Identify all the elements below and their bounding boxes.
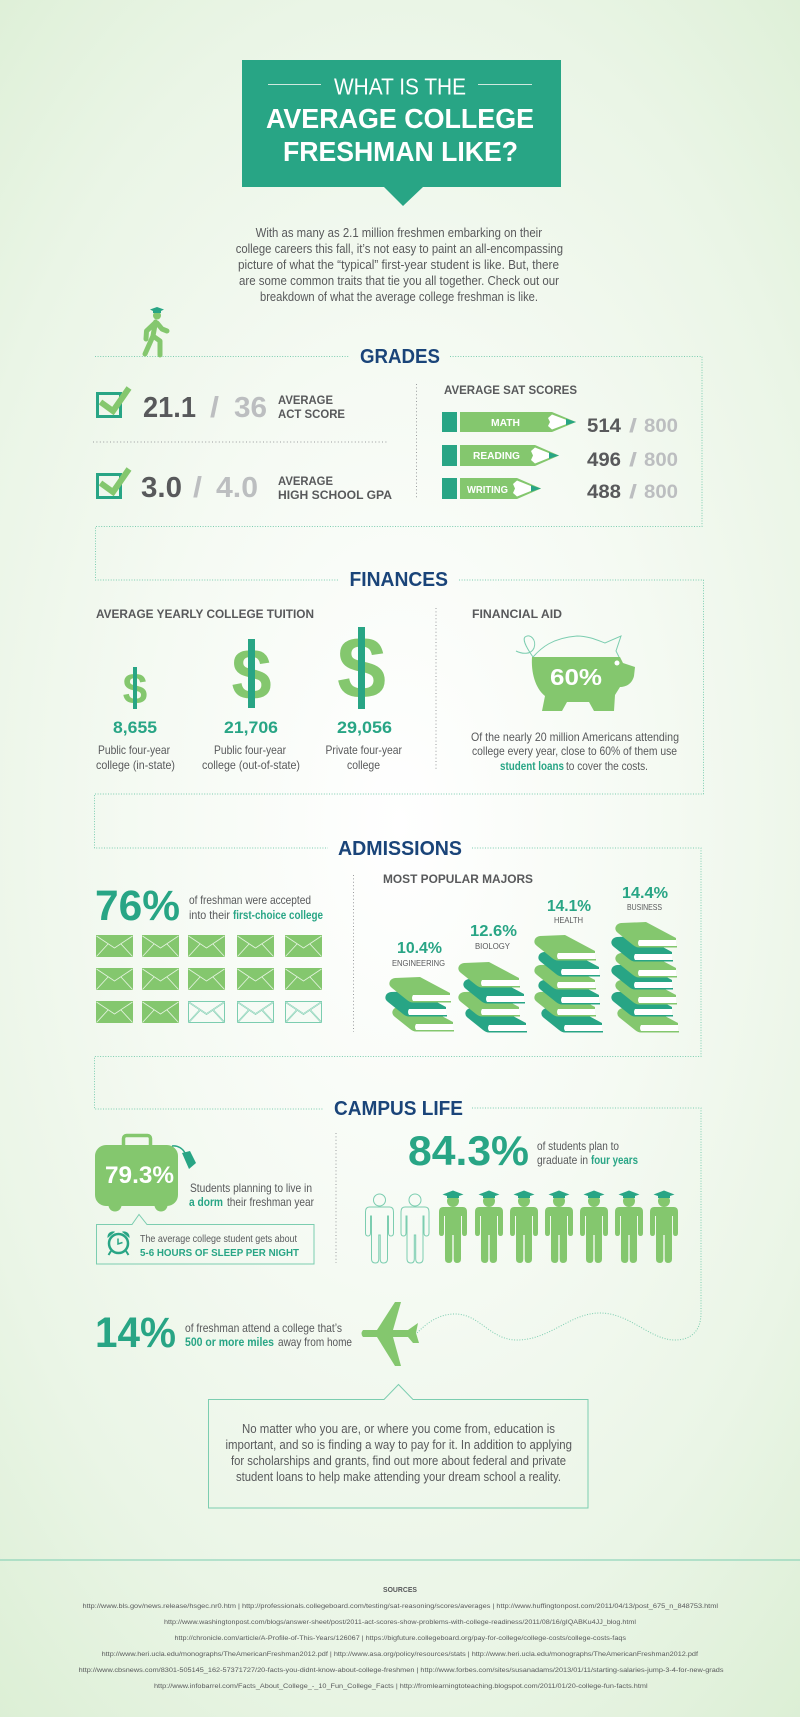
dorm statistic with suitcase: Students planning to live in <box>190 1181 312 1195</box>
most popular majors <box>383 874 679 1032</box>
tuition: in-state: college (in-state) <box>96 758 175 772</box>
graduation statistic: of students plan to <box>537 1139 619 1153</box>
icon: alarm clock <box>108 1232 129 1255</box>
graduation statistic <box>408 1127 638 1174</box>
sources: http://www.infobarrel.com/Facts_About_College_-_10_Fun_College_Facts | http://fromlearningtoteaching.blogspot.com/2011/01/20-college-fun-facts.html <box>154 1683 648 1690</box>
major: business: 14.4% <box>622 885 668 902</box>
financial aid text: college every year, close to 60% of them use <box>472 744 677 758</box>
panel: grades <box>93 346 678 504</box>
tuition: out-of-state: $ <box>231 635 272 715</box>
icon: piggy bank <box>516 636 635 711</box>
financial aid: FINANCIAL AID <box>472 609 562 621</box>
pencil: reading: 496 <box>587 450 621 471</box>
pencil: math <box>442 412 678 437</box>
intro paragraph: college careers this fall, it’s not easy to paint an all-encompassing <box>236 242 563 256</box>
graduation statistic: four years <box>591 1153 638 1167</box>
distance statistic: of freshman attend a college that’s <box>185 1321 342 1335</box>
financial aid text: student loans <box>500 759 564 773</box>
ACT score: ACT SCORE <box>278 409 345 421</box>
GPA score: AVERAGE <box>278 476 333 488</box>
tuition: in-state <box>96 665 175 772</box>
closing callout: No matter who you are, or where you come from, education is <box>242 1422 555 1436</box>
financial aid <box>471 609 679 773</box>
major: biology: 12.6% <box>470 923 517 940</box>
tuition: private <box>326 618 402 772</box>
intro paragraph: picture of what the “typical” first-year student is like. But, there <box>238 258 559 272</box>
pencil: writing: 488 <box>587 482 621 503</box>
dorm statistic with suitcase <box>95 1136 314 1212</box>
graduation statistic: 84.3% <box>408 1127 529 1174</box>
callout: sleep: The average college student gets about <box>140 1233 297 1245</box>
major: business: BUSINESS <box>627 902 662 912</box>
pencil: math: 514 <box>587 416 621 437</box>
tuition: in-state: 8,655 <box>113 719 157 737</box>
major: engineering: 10.4% <box>397 940 442 957</box>
financial aid text: to cover the costs. <box>566 759 648 773</box>
tuition: in-state: Public four-year <box>98 743 170 757</box>
distance statistic: 500 or more miles <box>185 1335 274 1349</box>
graduation statistic: graduate in <box>537 1153 588 1167</box>
envelopes pictogram <box>96 935 322 1023</box>
dorm statistic with suitcase: 79.3% <box>105 1162 174 1189</box>
heading: finances: FINANCES <box>350 569 448 591</box>
GPA score: HIGH SCHOOL GPA <box>278 490 392 502</box>
ACT score: / <box>210 392 219 424</box>
closing callout <box>208 1384 588 1508</box>
panel: campus life <box>95 1098 678 1366</box>
title banner: AVERAGE COLLEGE <box>266 103 534 134</box>
tuition: private: 29,056 <box>337 719 392 737</box>
intro paragraph <box>236 226 563 304</box>
heading: admissions: ADMISSIONS <box>338 838 462 860</box>
intro paragraph: breakdown of what the average college freshman is like. <box>260 290 538 304</box>
financial aid text: Of the nearly 20 million Americans attending <box>471 730 679 744</box>
callout: sleep: 5-6 HOURS OF SLEEP PER NIGHT <box>140 1247 300 1259</box>
GPA score <box>98 469 392 504</box>
pencil: writing: WRITING <box>467 485 508 496</box>
major: engineering <box>385 940 454 1032</box>
SAT scores: AVERAGE SAT SCORES <box>444 385 577 397</box>
ACT score: 21.1 <box>143 392 196 424</box>
closing callout: student loans to help make attending your dream school a reality. <box>236 1470 561 1484</box>
sources: http://chronicle.com/article/A-Profile-of-This-Years/126067 | https://bigfuture.collegeboard.org/pay-for-college/college-costs/college-costs-faqs <box>174 1635 627 1642</box>
sources: http://www.cbsnews.com/8301-505145_162-57371727/20-facts-you-didnt-know-about-college-freshmen | http://www.forbes.com/sites/susanadams/2013/01/11/starting-salaries-jump-3-4-for-new-grads <box>79 1667 724 1674</box>
accepted statistic: first-choice college <box>233 908 323 922</box>
pencil: reading: READING <box>473 451 520 462</box>
icon: airplane <box>362 1302 419 1366</box>
major: biology <box>458 923 527 1032</box>
icon: piggy bank: 60% <box>550 664 602 690</box>
most popular majors: MOST POPULAR MAJORS <box>383 874 533 886</box>
dorm statistic with suitcase: a dorm <box>189 1195 223 1209</box>
tuition: private: college <box>347 758 380 772</box>
callout: sleep <box>96 1214 314 1264</box>
GPA score: 3.0 <box>141 472 182 504</box>
pencil: writing: 800 <box>644 482 678 503</box>
major: engineering: ENGINEERING <box>392 958 445 968</box>
tuition: in-state: $ <box>123 665 147 714</box>
SAT scores <box>442 385 678 503</box>
people pictogram <box>366 1190 678 1263</box>
panel: finances <box>96 569 679 773</box>
ACT score <box>98 388 345 424</box>
pencil: math: MATH <box>491 418 520 429</box>
sources: http://www.heri.ucla.edu/monographs/TheAmericanFreshman2012.pdf | http://www.asa.org/policy/resources/stats | http://www.heri.ucla.edu/monographs/TheAmericanFreshman2012.pdf <box>102 1651 698 1658</box>
tuition: out-of-state: 21,706 <box>224 719 278 737</box>
ACT score: AVERAGE <box>278 395 333 407</box>
tuition: AVERAGE YEARLY COLLEGE TUITION <box>96 609 314 621</box>
major: health <box>534 898 603 1032</box>
tuition: private: $ <box>337 618 386 717</box>
tuition: out-of-state: college (out-of-state) <box>202 758 300 772</box>
icon: walking graduate <box>145 307 167 355</box>
distance statistic: 14% <box>95 1309 176 1357</box>
pencil: writing <box>442 478 678 503</box>
ACT score: 36 <box>234 392 267 424</box>
sources <box>79 1585 724 1690</box>
title banner: FRESHMAN LIKE? <box>283 136 518 167</box>
financial aid text <box>471 730 679 773</box>
sources: http://www.bls.gov/news.release/hsgec.nr0.htm | http://professionals.collegeboard.com/testing/sat-reasoning/scores/averages | http://www.huffingtonpost.com/2011/04/13/post_675_n_848753.html <box>82 1603 719 1610</box>
GPA score: 4.0 <box>216 472 258 504</box>
heading: campus life: CAMPUS LIFE <box>334 1098 463 1120</box>
pencil: math: 800 <box>644 416 678 437</box>
accepted statistic <box>95 882 323 930</box>
tuition: private: Private four-year <box>326 743 402 757</box>
pencil: reading: 800 <box>644 450 678 471</box>
tuition: out-of-state <box>202 635 300 772</box>
GPA score: / <box>193 472 202 504</box>
sources: SOURCES <box>383 1585 417 1594</box>
intro paragraph: are some common traits that tie you all together. Check out our <box>239 274 559 288</box>
major: biology: BIOLOGY <box>475 941 510 951</box>
tuition <box>96 609 402 772</box>
heading: grades: GRADES <box>360 346 440 368</box>
pencil: reading <box>442 445 678 471</box>
title banner <box>242 60 561 206</box>
accepted statistic: into their <box>189 908 230 922</box>
intro paragraph: With as many as 2.1 million freshmen embarking on their <box>256 226 542 240</box>
major: business <box>611 885 679 1032</box>
major: health: HEALTH <box>554 915 583 925</box>
title banner: WHAT IS THE <box>334 74 466 100</box>
accepted statistic: of freshman were accepted <box>189 893 311 907</box>
distance statistic <box>95 1309 352 1357</box>
accepted statistic: 76% <box>95 882 180 930</box>
tuition: out-of-state: Public four-year <box>214 743 286 757</box>
closing callout: important, and so is finding a way to pay for it. In addition to applying <box>226 1438 572 1452</box>
pencil: math: / <box>629 416 638 437</box>
pencil: writing: / <box>629 482 638 503</box>
panel: admissions <box>95 838 679 1032</box>
major: health: 14.1% <box>547 898 591 915</box>
dorm statistic with suitcase: their freshman year <box>227 1195 314 1209</box>
distance statistic: away from home <box>278 1335 352 1349</box>
sources: http://www.washingtonpost.com/blogs/answer-sheet/post/2011-act-scores-show-problems-with-college-readiness/2011/08/16/gIQABKu4JJ_blog.html <box>164 1619 637 1626</box>
pencil: reading: / <box>629 450 638 471</box>
closing callout: for scholarships and grants, find out more about federal and private <box>231 1454 566 1468</box>
